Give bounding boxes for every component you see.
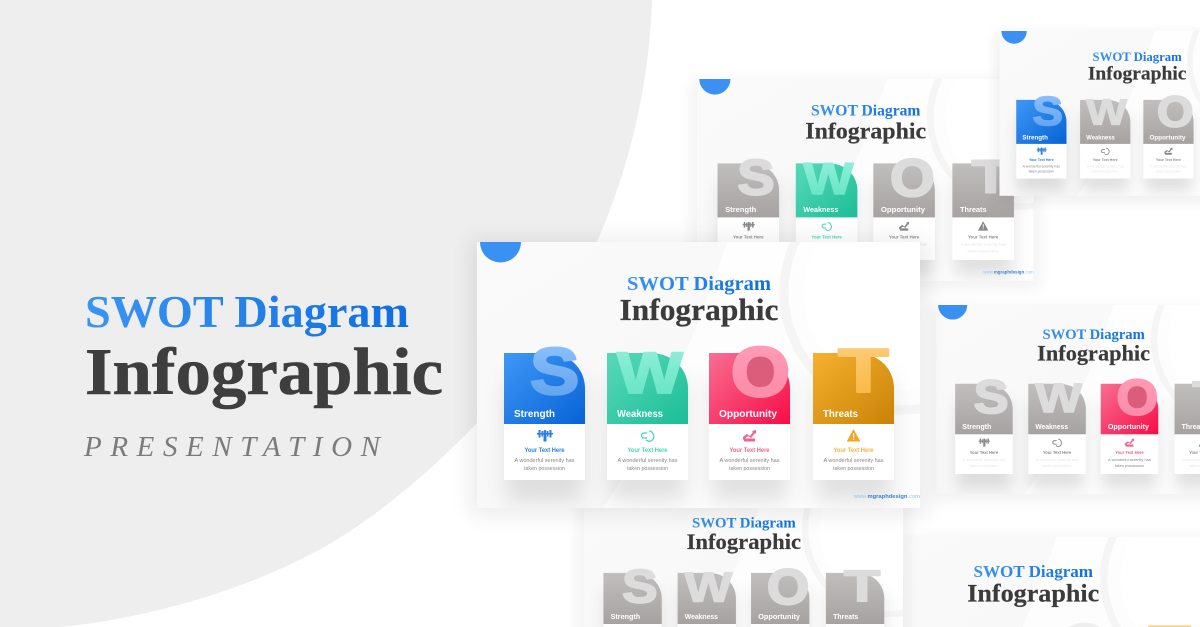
title [1037,327,1150,365]
card: Strength: S [737,150,775,206]
card: Threats: A wonderful serenity has [960,242,1006,247]
card: Weakness [1080,93,1130,192]
card: Weakness: Weakness [1086,135,1115,142]
card: Strength: Your Text Here [733,235,764,240]
card: Strength: taken possession [524,466,565,472]
card: Strength active: taken possession [1029,169,1054,173]
card: Opportunity: A wonderful serenity has [1150,164,1187,168]
card: Weakness: taken possession [627,466,668,472]
card: Opportunity: taken possession [889,248,920,253]
card: Weakness [678,564,736,627]
card: Strength [955,371,1013,489]
card: Weakness active: W [803,155,853,204]
card: Opportunity active: O [1116,369,1158,425]
title: SWOT Diagram [973,562,1093,581]
card: Threats: T [838,336,889,406]
card: Weakness [607,340,688,501]
card: Opportunity active: Opportunity [1108,423,1149,431]
title: Infographic [1037,340,1150,365]
card: Strength [603,559,662,627]
card: Opportunity active: Your Text Here [1115,450,1144,455]
card: Threats [813,336,894,501]
title: Infographic [620,292,778,327]
slide: bottom right, threats highlighted [968,537,1192,627]
title: SWOT Diagram [1042,327,1145,343]
card: Opportunity: O [890,148,935,208]
card: Weakness: Weakness [685,612,718,621]
card: Strength: taken possession [733,248,764,253]
card: Weakness active [793,162,860,242]
slide: right middle, opportunity highlighted [933,305,1200,498]
card: Strength [504,335,585,501]
title [967,562,1099,608]
card: Opportunity: Your Text Here [730,448,770,454]
card: Threats: Your Text Here [834,448,874,454]
card: Opportunity: O [767,560,809,615]
card: Weakness: Weakness [617,409,663,420]
card: Strength: A wonderful serenity has [725,242,771,247]
card: Weakness: Your Text Here [1093,158,1118,162]
card: Opportunity [1143,87,1194,192]
slide: bottom centre [581,508,906,627]
card: Threats: Your Text Here [968,235,999,240]
website: www.mgraphdesign.com [853,494,920,500]
corner accent [938,305,967,320]
title: SWOT Diagram [811,102,920,119]
card: Opportunity: Your Text Here [1156,158,1181,162]
card: Weakness [1028,375,1086,489]
card: Threats: taken possession [968,248,999,253]
title [805,102,926,144]
card: Threats: Threats [960,205,987,214]
card: Strength: Your Text Here [524,448,565,454]
card: Strength: Your Text Here [970,450,999,455]
card: Opportunity: Opportunity [758,612,800,621]
card: Opportunity active: A wonderful serenity has [1108,457,1151,462]
title: SWOT Diagram [627,273,771,295]
card: Strength active [1016,89,1066,192]
card: Opportunity: Your Text Here [889,235,920,240]
card: Threats [826,561,884,627]
card: Opportunity: O [731,334,790,411]
slide: top, weakness highlighted [694,79,1037,286]
card: Strength: Strength [962,423,991,431]
card: Weakness: W [617,340,683,406]
website: www.mgraphdesign.com [983,270,1034,275]
grey curved panel [0,0,652,627]
card: Weakness: W [1086,93,1128,133]
card: Opportunity [873,148,935,276]
card: Opportunity: A wonderful serenity has [720,458,780,464]
card: Weakness: Weakness [1035,423,1068,431]
card: Opportunity: O [1157,87,1193,136]
card: Threats [1175,373,1200,489]
card: Weakness: W [685,564,733,611]
slide: main, all quadrants coloured [468,238,928,516]
card: Strength: S [622,559,658,613]
card: Opportunity active [1101,369,1158,489]
card: Opportunity active: taken possession [1115,463,1144,468]
card: Weakness active: taken possession [811,248,843,253]
title: SWOT Diagram [692,516,796,532]
card: Opportunity: Opportunity [1150,135,1186,142]
card: Weakness: Your Text Here [628,448,668,454]
title: Infographic [967,579,1099,608]
card: Opportunity [709,334,790,501]
card: Weakness: A wonderful serenity has [618,458,678,464]
card: Opportunity [751,560,809,627]
card: Strength: A wonderful serenity has [963,457,1005,462]
card: Threats [952,151,1014,276]
card: Opportunity: taken possession [729,466,770,472]
card: Weakness: Your Text Here [1043,450,1072,455]
card: Threats: Threats [823,409,858,420]
card: Strength: S [974,371,1009,423]
card: Opportunity: Opportunity [881,205,926,214]
card: Strength active: Strength [1022,135,1048,142]
card: Strength active: S [1032,89,1063,135]
card: Weakness: taken possession [1042,463,1072,468]
card: Weakness: A wonderful serenity has [1087,164,1124,168]
card: Strength active: A wonderful serenity has [1023,164,1060,168]
card: Strength active: Your Text Here [1029,158,1054,162]
heading: SWOT Diagram: SWOT Diagram [85,286,409,337]
card: Strength: Strength [611,612,640,621]
heading block [83,286,443,463]
card: Opportunity: A wonderful serenity has [881,242,927,247]
card: Opportunity: Opportunity [719,409,777,420]
slide: top right, strength highlighted [996,31,1200,201]
card: Strength: S [530,335,579,408]
card: Strength [715,158,782,242]
card: Threats: taken possession [833,466,874,472]
card: Strength: Strength [514,409,555,420]
title [687,516,801,554]
card: Threats: Threats [833,612,858,621]
subheading: Presentation: PRESENTATION [83,431,382,463]
card: Weakness active: Your Text Here [811,235,842,240]
card: Weakness active: Weakness [803,205,838,214]
title [620,273,778,327]
corner accent [480,242,521,262]
card: Strength: taken possession [969,463,998,468]
title: Infographic [805,118,926,144]
corner accent [1001,31,1027,44]
card: Weakness: W [1035,375,1082,421]
card: Weakness active: A wonderful serenity has [804,242,849,247]
card: Opportunity: taken possession [1156,169,1181,173]
title: SWOT Diagram [1093,50,1182,64]
heading: Infographic: Infographic [85,335,443,409]
title: Infographic [687,529,801,554]
card: Threats: A wonderful serenity has [824,458,884,464]
card: Weakness: A wonderful serenity has [1036,457,1078,462]
card: Threats: T [844,561,880,611]
corner accent [699,79,730,95]
title [1088,50,1187,84]
card: Strength: A wonderful serenity has [514,458,575,464]
card: Weakness: taken possession [1093,169,1118,173]
card: Strength: Strength [725,205,757,214]
title: Infographic [1088,63,1187,84]
card: Threats: T [971,151,1010,203]
